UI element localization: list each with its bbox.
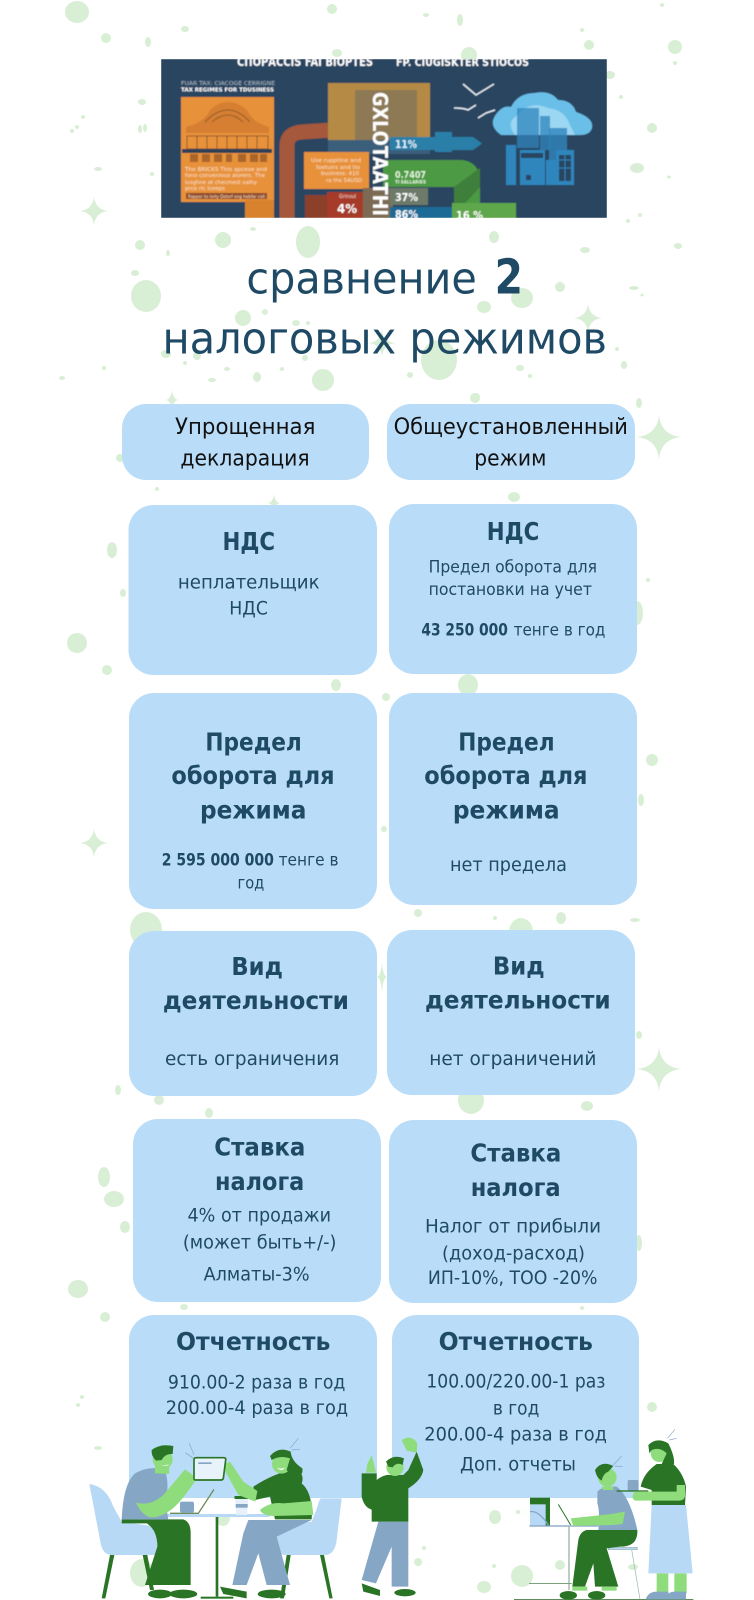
- panel: VAT simplified: [128, 505, 377, 675]
- panel: reporting general: в год: [493, 1397, 539, 1419]
- thumbnail: percent bars and arrows: [383, 132, 516, 222]
- tablet: [194, 1458, 226, 1480]
- panel: tax rate general: Ставка: [470, 1139, 561, 1168]
- thumbnail: orange building: The BRICKS This apcese and: [184, 167, 267, 173]
- panel: tax rate general: (доход-расход): [442, 1242, 585, 1264]
- panel: turnover limit simplified: 2 595 000 000: [162, 851, 274, 871]
- thumbnail: red 4 percent block: 4%: [337, 202, 357, 216]
- left chair: [89, 1484, 157, 1598]
- panel: tax rate general: Налог от прибыли: [425, 1215, 601, 1237]
- panel: header simplified declaration: декларация: [180, 447, 310, 472]
- title: сравнение: [246, 253, 477, 304]
- panel: activity type general: Вид: [493, 951, 545, 980]
- panel: turnover limit simplified: [129, 693, 377, 909]
- thumbnail: percent bars and arrows: 37%: [395, 191, 418, 204]
- panel: turnover limit simplified: год: [238, 873, 264, 893]
- panel: reporting general: 100.00/220.00-1 раз: [426, 1371, 605, 1393]
- thumbnail: percent bars and arrows: 11%: [395, 138, 417, 151]
- illustration: two people at a table with tablet: [89, 1438, 342, 1599]
- thumbnail: percent bars and arrows: TI EALLARIES: [395, 180, 426, 186]
- panel: tax rate general: [389, 1120, 637, 1303]
- panel: tax rate simplified: 4% от продажи: [188, 1205, 331, 1227]
- panel: header general regime: режим: [474, 447, 546, 472]
- thumbnail: percent bars and arrows: 0.7407: [395, 170, 426, 181]
- thumbnail: orange building: prce ric lceeps: [185, 186, 225, 192]
- illustration: tax regimes thumbnail image: [161, 55, 607, 222]
- right chair: [276, 1498, 342, 1598]
- panel: activity type general: [387, 930, 635, 1095]
- panel: activity type simplified: есть ограничения: [165, 1048, 339, 1070]
- panel: VAT simplified: НДС: [222, 527, 275, 556]
- panel: turnover limit general: [389, 693, 637, 905]
- illustration: desk with laptop worker: [514, 1429, 693, 1600]
- panel: tax rate simplified: налога: [215, 1167, 304, 1196]
- panel: reporting simplified: 200.00-4 раза в год: [166, 1397, 348, 1419]
- title: [162, 249, 607, 364]
- thumbnail: orange building: fono convenious alorers. The: [185, 173, 266, 179]
- thumbnail: birds: [454, 84, 495, 118]
- woman with tablet: [220, 1438, 313, 1598]
- seated man: [560, 1456, 637, 1600]
- thumbnail: orange note: foetuirs and tio: [316, 165, 361, 171]
- thumbnail: orange note: ra the 5AUSD: [326, 178, 362, 184]
- title: налоговых режимов: [162, 313, 607, 364]
- panel: header simplified declaration: Упрощенная: [175, 415, 315, 440]
- panel: turnover limit simplified: тенге в: [279, 851, 339, 871]
- thumbnail: vertical title: GXLOTAATHI: [368, 92, 392, 216]
- panel: reporting simplified: [129, 1315, 377, 1498]
- panel: reporting general: [392, 1315, 639, 1498]
- thumbnail: top captions: CПОРACCIS FAI BIOPTES: [237, 55, 373, 69]
- thumbnail: orange building: lusghne at checmest oalhy: [185, 180, 258, 186]
- panel: activity type general: деятельности: [425, 985, 611, 1014]
- thumbnail: red 4 percent block: [305, 192, 363, 218]
- panel: turnover limit general: режима: [453, 795, 560, 824]
- panel: tax rate simplified: (может быть+/-): [183, 1231, 336, 1253]
- thumbnail: cloud city: [493, 92, 592, 185]
- panel: reporting general: Доп. отчеты: [460, 1454, 576, 1476]
- thumbnail: orange note: business: 410: [321, 171, 359, 177]
- panel: activity type simplified: Вид: [231, 952, 283, 981]
- panel: turnover limit simplified: оборота для: [171, 761, 335, 790]
- panel: reporting simplified: 910.00-2 раза в год: [168, 1371, 345, 1393]
- panel: tax rate simplified: [133, 1119, 381, 1302]
- panel: VAT simplified: неплательщик: [178, 571, 320, 593]
- panel: VAT general: тенге в год: [514, 621, 605, 641]
- panel: VAT general: Предел оборота для: [429, 557, 597, 577]
- thumbnail: top captions: TAX REGIMES FOR TDUSINESS: [181, 88, 274, 94]
- panel: VAT general: НДС: [487, 517, 539, 546]
- panel: reporting general: 200.00-4 раза в год: [424, 1424, 607, 1446]
- thumbnail: brown pipe: [287, 130, 332, 218]
- panel: activity type simplified: [129, 931, 377, 1096]
- panel: turnover limit general: нет предела: [450, 854, 567, 876]
- thumbnail: orange building: [181, 97, 274, 218]
- panel: VAT simplified: НДС: [229, 597, 268, 619]
- panel: reporting simplified: Отчетность: [176, 1327, 330, 1356]
- title: 2: [495, 249, 523, 305]
- thumbnail: percent bars and arrows: 16 %: [456, 209, 483, 222]
- panel: header general regime: [387, 404, 635, 480]
- panel: VAT general: [389, 504, 637, 674]
- panel: turnover limit simplified: режима: [200, 795, 306, 824]
- panel: header simplified declaration: [122, 404, 369, 480]
- panel: tax rate general: ИП-10%, ТОО -20%: [428, 1267, 598, 1289]
- panel: header general regime: Общеустановленный: [394, 415, 628, 440]
- thumbnail: orange note: Use rupptine and: [311, 158, 361, 164]
- thumbnail: top captions: FUAR TAX: CIACOGE CERRIGNE: [181, 81, 276, 87]
- panel: turnover limit simplified: Предел: [205, 728, 302, 757]
- panel: VAT general: 43 250 000: [421, 621, 508, 641]
- thumbnail: olive block: [328, 83, 430, 154]
- panel: tax rate general: налога: [471, 1173, 561, 1202]
- thumbnail: orange note: [304, 152, 369, 189]
- thumbnail: percent bars and arrows: 86%: [395, 208, 418, 221]
- floor and desk: [514, 1498, 693, 1600]
- panel: tax rate simplified: Алматы-3%: [204, 1264, 310, 1286]
- thumbnail: orange building: Rapper to lerty Dotsrf eng habfar coli: [188, 194, 265, 200]
- man with tablet: [122, 1443, 197, 1598]
- thumbnail: top captions: [180, 59, 530, 92]
- panel: activity type general: нет ограничений: [429, 1048, 596, 1070]
- standing woman with tray: [617, 1429, 693, 1599]
- panel: turnover limit general: оборота для: [424, 761, 588, 790]
- illustration: man with raised arm: [362, 1438, 423, 1596]
- thumbnail: top captions: FP. CIUGISKTER STIOCOS: [396, 56, 529, 69]
- panel: tax rate simplified: Ставка: [214, 1133, 305, 1162]
- panel: turnover limit general: Предел: [458, 728, 555, 757]
- panel: reporting general: Отчетность: [439, 1327, 593, 1356]
- thumbnail: red 4 percent block: Grinsul: [339, 194, 356, 200]
- panel: activity type simplified: деятельности: [163, 986, 349, 1015]
- panel: VAT general: постановки на учет: [429, 580, 592, 600]
- table: [162, 1489, 321, 1599]
